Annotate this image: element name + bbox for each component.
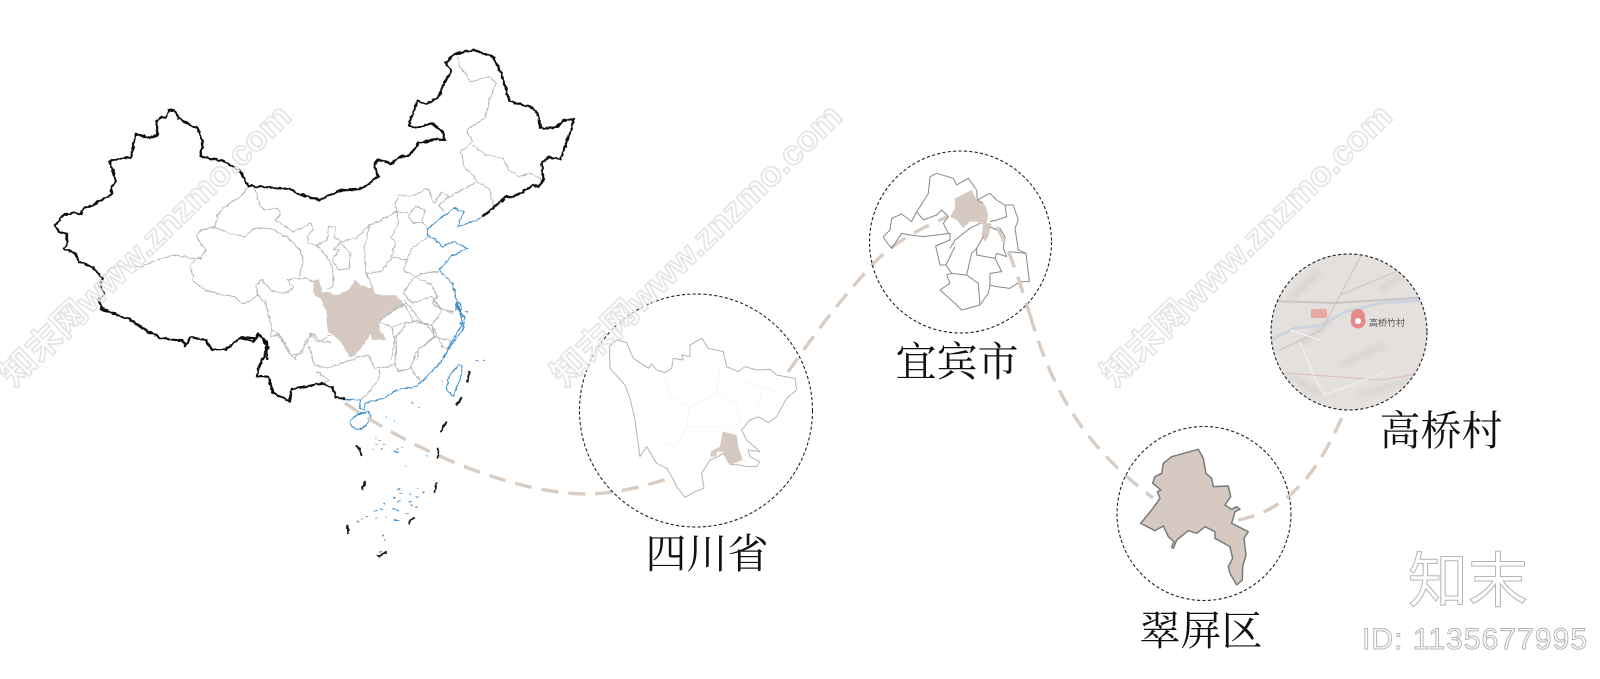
label: Sichuan: 四川省 <box>646 531 768 577</box>
connector: dashed curve to Sichuan <box>345 403 672 494</box>
watermark logo <box>1362 548 1587 656</box>
connector: dashed curve inside Yibin <box>997 227 1030 315</box>
dashed ring <box>870 151 1052 333</box>
island: Hainan <box>350 412 371 430</box>
south border, coast, islands and nine-dash line <box>240 303 484 556</box>
province borders north <box>103 57 543 360</box>
connector: dashed curve to Cuiping <box>1030 315 1153 498</box>
watermark diagonals: 知末网www.znzmo.com <box>1094 97 1400 394</box>
watermark logo: 知末 <box>1408 548 1528 615</box>
dashed ring <box>1117 426 1291 600</box>
location pin <box>1350 309 1366 328</box>
watermark diagonals: 知末网www.znzmo.com <box>544 97 850 394</box>
label: Gaoqiao: 高桥村 <box>1380 408 1502 454</box>
connector: dashed curve to Yibin <box>788 217 947 372</box>
Cuiping map <box>1141 449 1248 585</box>
panel: Gaoqiao village <box>1265 250 1502 454</box>
connector: dashed curve to Gaoqiao <box>1238 410 1345 520</box>
national border <box>55 50 574 360</box>
panel: Cuiping <box>1117 426 1291 654</box>
watermark logo: ID: 1135677995 <box>1362 623 1587 656</box>
highlighted province: Sichuan on China map <box>313 279 403 357</box>
dashed ring <box>580 294 812 527</box>
map place name: 高桥竹村 <box>1369 317 1405 328</box>
label: Cuiping: 翠屏区 <box>1140 608 1262 654</box>
dashed ring <box>1271 254 1427 410</box>
Sichuan map <box>609 338 797 497</box>
island: Taiwan <box>447 365 462 397</box>
map: China <box>55 50 574 556</box>
watermark diagonals <box>0 97 1400 394</box>
South China Sea islands <box>357 359 484 552</box>
village map <box>1271 254 1427 410</box>
label: Yibin: 宜宾市 <box>896 339 1018 385</box>
watermark diagonals: 知末网www.znzmo.com <box>0 97 299 394</box>
Yibin map <box>883 173 1029 310</box>
nine-dash line <box>347 371 469 556</box>
panel: Yibin <box>870 151 1052 385</box>
province borders south <box>265 300 453 400</box>
panel: Sichuan <box>580 294 812 577</box>
